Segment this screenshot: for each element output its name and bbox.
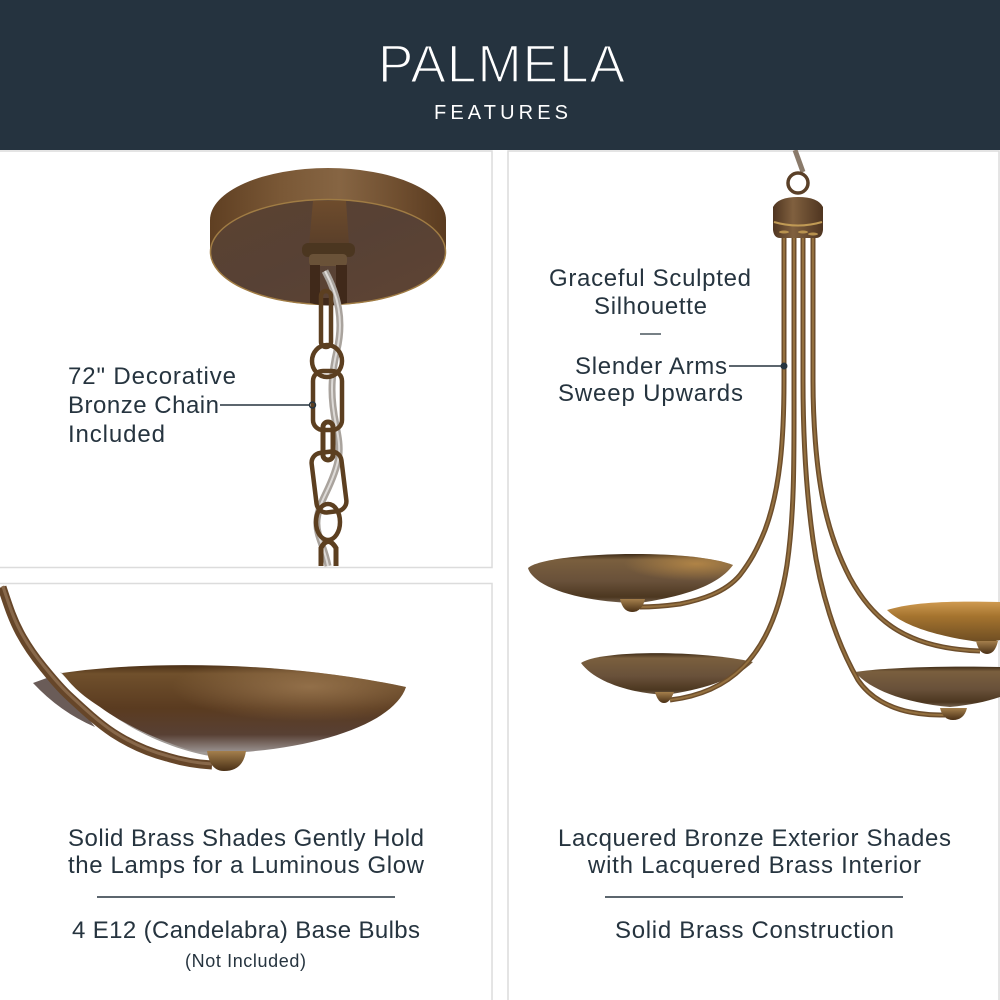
text: shade description: 4 E12 (Candelabra) Base Bulbs <box>72 917 420 944</box>
callout: arms label: Graceful Sculpted <box>549 265 751 292</box>
icon: shade finials <box>620 599 998 720</box>
callout: chain label: Included <box>68 421 165 448</box>
icon: shade highlight <box>62 665 406 752</box>
icon: shade lower left <box>581 653 753 695</box>
icon: shade upper right <box>887 602 1000 643</box>
icon: chandelier chain and ring <box>788 150 808 193</box>
title: PALMELA <box>378 35 626 94</box>
icon: bronze shade <box>62 665 406 752</box>
icon: shade lower right <box>855 667 1000 707</box>
callout: chain label: 72" Decorative <box>68 363 236 390</box>
icon: chain links <box>310 291 348 566</box>
icon: shade underside <box>33 675 95 727</box>
text: finish description: Solid Brass Construction <box>615 917 894 944</box>
icon: shade inner strip <box>60 672 210 756</box>
panel: shade detail <box>0 584 492 1000</box>
icon: shade upper left highlight <box>528 554 733 603</box>
text: finish description <box>558 825 951 944</box>
callout: arms label: Slender Arms <box>575 353 727 380</box>
callout: chain label <box>68 363 316 448</box>
icon: shade upper left <box>528 554 733 603</box>
text: shade description: the Lamps for a Luminous Glow <box>68 852 425 879</box>
panel: decorative chain <box>0 151 492 568</box>
callout: arms label <box>549 265 788 407</box>
callout: chain label: Bronze Chain <box>68 392 219 419</box>
panel: full chandelier <box>508 150 1000 1000</box>
icon: arm highlights <box>640 235 980 715</box>
callout: arms label: Silhouette <box>594 293 707 320</box>
text: shade description <box>68 825 425 971</box>
text: shade description: (Not Included) <box>185 951 306 971</box>
icon: arm cap <box>773 197 823 238</box>
icon: shade arm <box>2 586 213 765</box>
text: finish description: with Lacquered Brass Interior <box>587 852 921 879</box>
callout: arms label: Sweep Upwards <box>558 380 743 407</box>
subtitle: FEATURES <box>434 102 568 124</box>
header banner <box>0 0 1000 150</box>
icon: ceiling canopy <box>210 168 446 306</box>
text: shade description: Solid Brass Shades Gently Hold <box>68 825 424 852</box>
icon: chandelier arms <box>640 235 980 715</box>
text: finish description: Lacquered Bronze Exterior Shades <box>558 825 951 852</box>
icon: electrical cord <box>317 271 340 566</box>
icon: shade finial <box>207 751 246 771</box>
